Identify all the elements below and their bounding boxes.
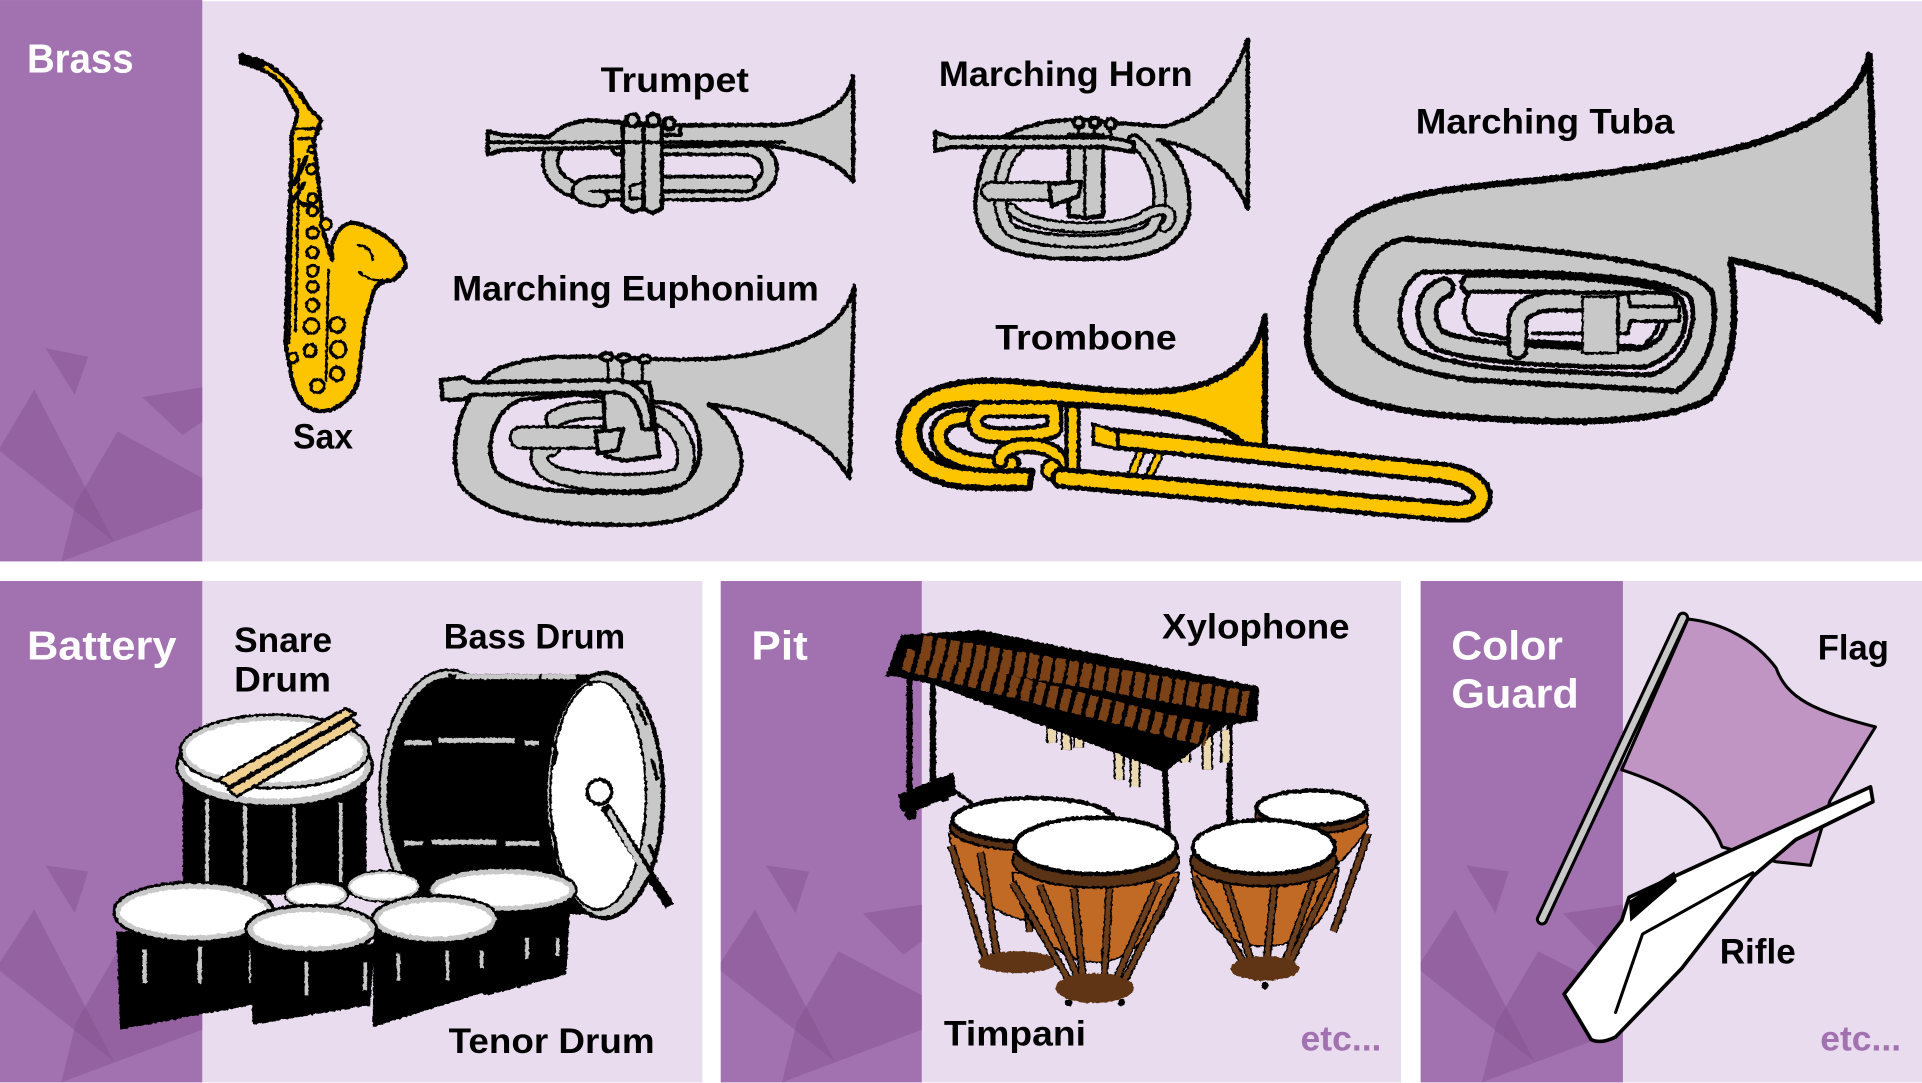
icon: trumpet (488, 76, 853, 213)
label: bass drum: Bass Drum (444, 616, 625, 656)
label: snare drum: Snare (234, 620, 332, 660)
icon: front timpano (1012, 818, 1179, 1006)
icon: drum sticks (218, 709, 359, 797)
label: etc: etc... (1301, 1018, 1381, 1058)
heading: battery: Battery (27, 622, 177, 668)
label: etc: etc... (1820, 1018, 1901, 1058)
icon: back-right timpano (1255, 791, 1368, 932)
icon: flag (1542, 618, 1875, 919)
icon: snare drum (181, 709, 368, 895)
icon: trombone (898, 316, 1482, 512)
label: rifle: Rifle (1720, 931, 1796, 971)
label: marching tuba: Marching Tuba (1416, 102, 1675, 142)
sidebar: pit (721, 581, 922, 1082)
panel: brass (0, 0, 1922, 561)
panel: battery (0, 581, 702, 1082)
heading: brass: Brass (27, 35, 134, 81)
label: sax: Sax (293, 417, 353, 457)
label: trumpet: Trumpet (601, 60, 749, 100)
icon: rifle (1564, 787, 1873, 1041)
sidebar: battery (0, 581, 202, 1082)
icon: xylophone (885, 630, 1259, 846)
icon: marching horn (935, 39, 1248, 259)
panel: color guard (1421, 581, 1922, 1082)
label: flag: Flag (1818, 627, 1889, 667)
sidebar: brass (0, 0, 202, 561)
label: tenor drum: Tenor Drum (449, 1021, 655, 1061)
panel: pit (721, 581, 1401, 1082)
icon: marching euphonium (441, 286, 854, 525)
icon: back-left timpano (949, 798, 1118, 973)
label: xylophone: Xylophone (1162, 607, 1350, 647)
heading: color guard: Color (1451, 622, 1563, 668)
icon: marching tuba (1308, 55, 1879, 421)
label: snare drum: Drum (234, 659, 331, 699)
icon: tenor drums (116, 872, 572, 1030)
label: marching horn: Marching Horn (939, 54, 1193, 94)
label: marching euphonium: Marching Euphonium (452, 268, 819, 308)
icon: flag pole (1542, 618, 1683, 919)
heading: color guard (1451, 622, 1579, 716)
label: timpani: Timpani (944, 1014, 1086, 1054)
icon: sax (241, 55, 406, 411)
label: trombone: Trombone (995, 317, 1177, 357)
icon: right timpano (1190, 820, 1339, 989)
icon: bass drum (384, 673, 674, 918)
icon: timpani (949, 791, 1368, 1006)
heading: color guard: Guard (1451, 670, 1579, 716)
sidebar: color guard (1421, 581, 1623, 1082)
heading: pit: Pit (751, 622, 808, 668)
label: snare drum (234, 620, 332, 699)
